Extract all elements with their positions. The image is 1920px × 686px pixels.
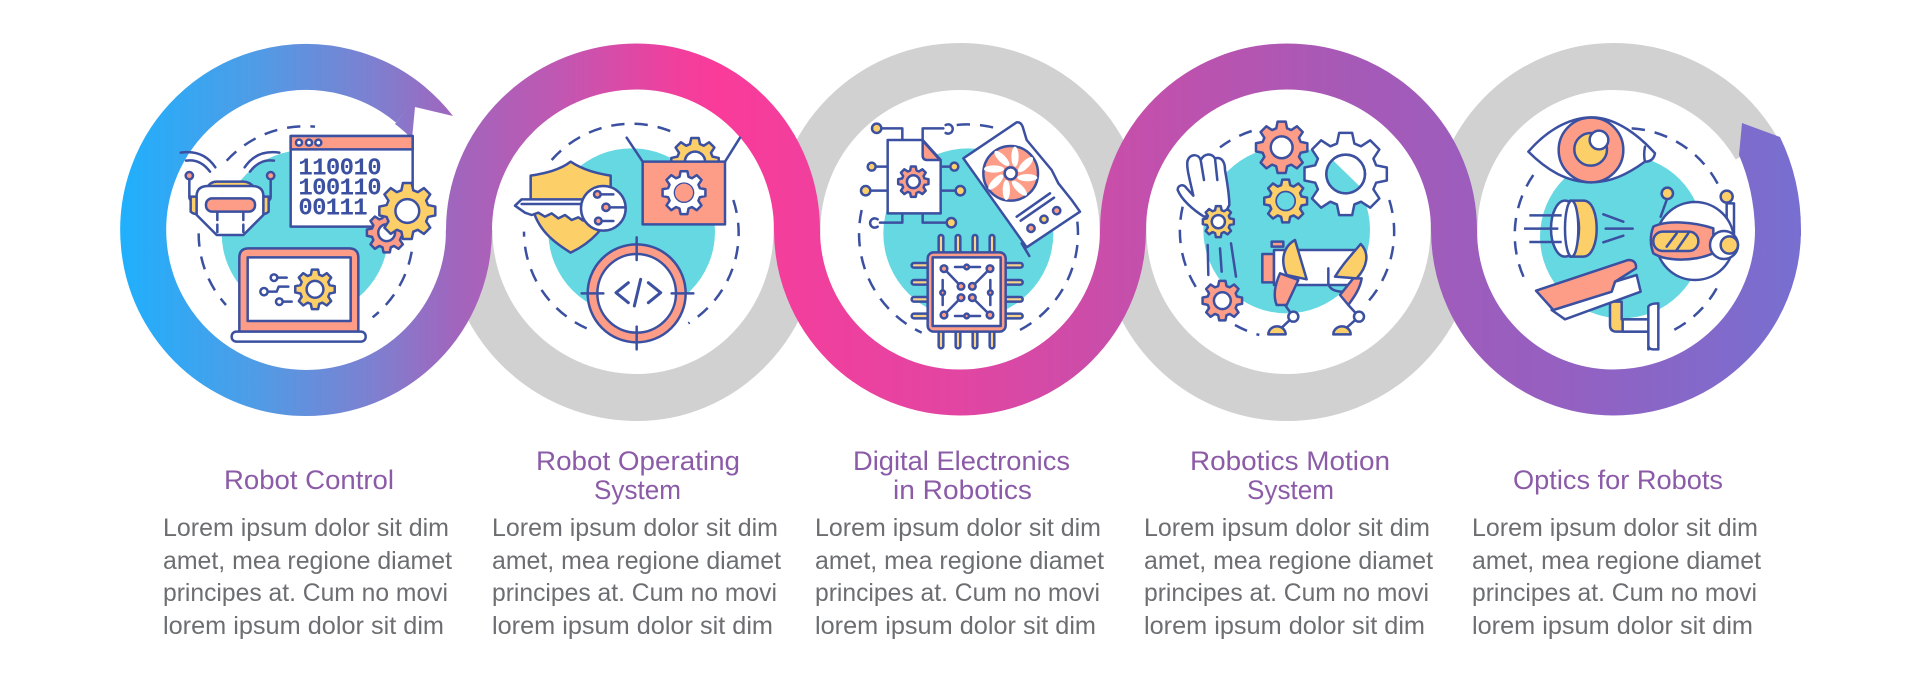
body text: lorem ipsum dolor sit dim (815, 612, 1096, 640)
gears (1256, 122, 1387, 222)
binary window: 00111 (298, 196, 368, 223)
body text: Lorem ipsum dolor sit dim (163, 514, 449, 542)
step 3 text: Digital Electronics in Robotics (815, 446, 1104, 640)
code target (582, 237, 693, 349)
body text: amet, mea regione diamet (163, 547, 452, 575)
heading: Robot Operating (536, 446, 740, 476)
body text: principes at. Cum no movi (1144, 579, 1429, 607)
body text: principes at. Cum no movi (1472, 579, 1757, 607)
robot head (181, 152, 279, 235)
body text: Lorem ipsum dolor sit dim (815, 514, 1101, 542)
body text: amet, mea regione diamet (492, 547, 781, 575)
body text: amet, mea regione diamet (1472, 547, 1761, 575)
heading: System (594, 475, 681, 505)
body text: principes at. Cum no movi (163, 579, 448, 607)
heading: Robot Control (224, 465, 394, 495)
eye (1528, 117, 1655, 182)
robot hand (1178, 155, 1242, 320)
heading (1190, 446, 1390, 505)
body text (1144, 514, 1433, 640)
body text: amet, mea regione diamet (815, 547, 1104, 575)
heading: in Robotics (893, 475, 1032, 505)
body text: Lorem ipsum dolor sit dim (1472, 514, 1758, 542)
icon: robotics motion (1178, 122, 1394, 335)
body text: lorem ipsum dolor sit dim (1472, 612, 1753, 640)
body text: principes at. Cum no movi (815, 579, 1100, 607)
open box with gears (627, 138, 740, 224)
binary window: 100110 (298, 176, 382, 203)
heading: Digital Electronics (853, 446, 1070, 476)
laptop (232, 248, 366, 342)
body text (492, 514, 781, 640)
body text: Lorem ipsum dolor sit dim (492, 514, 778, 542)
robot dog (1262, 240, 1366, 334)
heading (853, 446, 1070, 505)
body text (163, 514, 452, 640)
shield and key (515, 162, 626, 253)
icon: digital electronics (859, 122, 1080, 348)
gradient ribbon with arrow ends (143, 66, 1801, 393)
binary window: 110010 (298, 156, 382, 183)
body text (815, 514, 1104, 640)
grey background ring segments (469, 66, 1756, 397)
graphics card (963, 122, 1080, 256)
icon: robot control (181, 126, 435, 342)
binary window (291, 136, 413, 227)
heading: Optics for Robots (1513, 465, 1723, 495)
body text: principes at. Cum no movi (492, 579, 777, 607)
body text: lorem ipsum dolor sit dim (163, 612, 444, 640)
body text: amet, mea regione diamet (1144, 547, 1433, 575)
heading (536, 446, 740, 505)
lens with rays (1524, 201, 1633, 257)
step 1 text: Robot Control (163, 465, 452, 640)
body text: Lorem ipsum dolor sit dim (1144, 514, 1430, 542)
body text (1472, 514, 1761, 640)
microchip (912, 235, 1023, 348)
body text: lorem ipsum dolor sit dim (492, 612, 773, 640)
security camera (1536, 260, 1658, 349)
icon: optics for robots (1515, 117, 1738, 349)
robot head (1651, 188, 1738, 280)
step 4 text: Robotics Motion System (1144, 446, 1433, 640)
step 5 text: Optics for Robots (1472, 465, 1761, 640)
gears (367, 183, 435, 252)
document with connectors (861, 124, 965, 228)
heading: Robotics Motion (1190, 446, 1390, 476)
step 2 text: Robot Operating System (492, 446, 781, 640)
icon: robot operating system (515, 124, 740, 349)
body text: lorem ipsum dolor sit dim (1144, 612, 1425, 640)
heading: System (1247, 475, 1334, 505)
